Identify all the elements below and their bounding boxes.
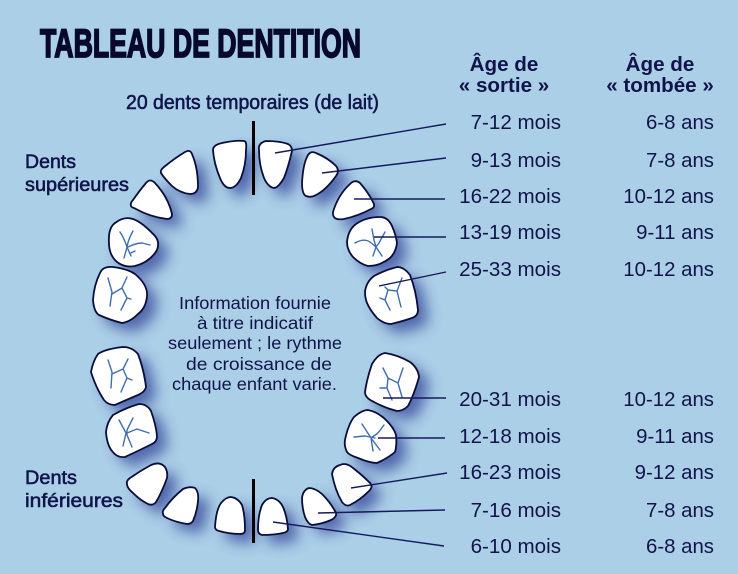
ages of loss: 6-8 ans: [646, 112, 714, 134]
ages of loss: 9-11 ans: [636, 426, 714, 448]
title: TABLEAU DE DENTITION: [40, 22, 361, 66]
column heading: âge de tombée: « tombée »: [606, 74, 714, 97]
centre note: [168, 293, 342, 394]
molar root veins: [108, 229, 403, 451]
centre note: de croissance de: [186, 354, 332, 374]
label: dents inférieures: inférieures: [25, 490, 123, 512]
ages of eruption: 12-18 mois: [459, 425, 561, 448]
ages of loss: [623, 112, 714, 558]
label: dents supérieures: Dents: [25, 151, 76, 173]
centre note: seulement ; le rythme: [168, 333, 342, 353]
leader lines: [273, 124, 447, 546]
label: dents inférieures: Dents: [25, 467, 77, 489]
label: dents supérieures: [25, 151, 129, 196]
ages of eruption: 9-13 mois: [471, 149, 561, 172]
ages of eruption: 7-16 mois: [471, 499, 561, 522]
ages of eruption: 6-10 mois: [471, 535, 561, 558]
ages of eruption: 25-33 mois: [459, 258, 561, 281]
column heading: âge de sortie: « sortie »: [459, 74, 549, 97]
ages of loss: 7-8 ans: [646, 150, 714, 172]
centre note: chaque enfant varie.: [172, 374, 337, 394]
ages of loss: 6-8 ans: [646, 536, 714, 558]
upper teeth: [93, 141, 418, 324]
ages of eruption: 16-23 mois: [459, 461, 561, 484]
centre note: à titre indicatif: [197, 313, 313, 333]
ages of loss: 9-12 ans: [635, 462, 714, 484]
ages of loss: 9-11 ans: [636, 222, 714, 244]
midline bars: [252, 121, 255, 543]
label: dents supérieures: supérieures: [25, 174, 129, 196]
subtitle: 20 dents temporaires: 20 dents temporaires (de lait): [126, 91, 379, 114]
ages of loss: 10-12 ans: [623, 186, 714, 208]
ages of eruption: 7-12 mois: [471, 111, 561, 134]
tooth shadows: [101, 150, 429, 544]
label: dents inférieures: [25, 467, 123, 512]
ages of eruption: 20-31 mois: [459, 388, 561, 411]
ages of loss: 10-12 ans: [623, 259, 714, 281]
column heading: âge de sortie: Âge de: [470, 52, 538, 76]
ages of eruption: [459, 111, 561, 558]
lower teeth: [91, 347, 419, 535]
ages of loss: 7-8 ans: [646, 500, 714, 522]
ages of loss: 10-12 ans: [623, 389, 714, 411]
column heading: âge de sortie: [459, 52, 549, 97]
ages of eruption: 16-22 mois: [459, 185, 561, 208]
centre note: Information fournie: [179, 293, 331, 313]
column heading: âge de tombée: [606, 52, 714, 97]
column heading: âge de tombée: Âge de: [626, 52, 694, 76]
ages of eruption: 13-19 mois: [459, 221, 561, 244]
